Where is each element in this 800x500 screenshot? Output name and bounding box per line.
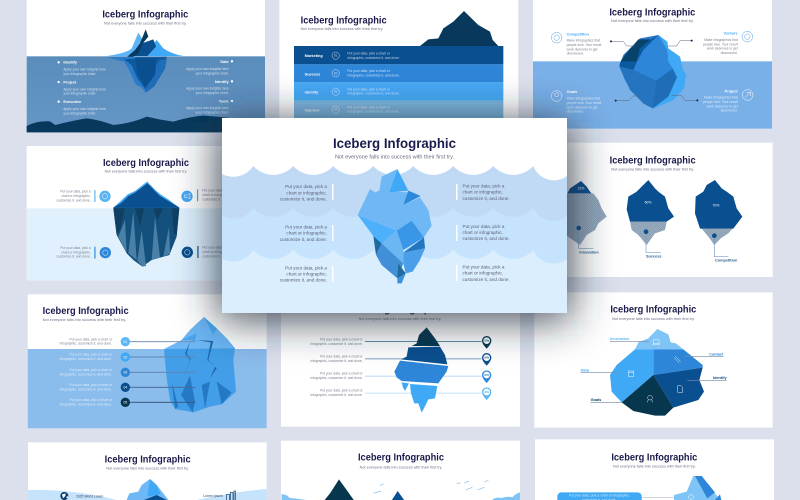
- label: Innovation: Innovation: [610, 337, 630, 341]
- text block right 2: [462, 224, 510, 241]
- text block right 3: chart or infographic,: [462, 271, 503, 276]
- icon row: top left: chart or infographic,: [61, 194, 91, 198]
- callout: Project: Project: [725, 89, 738, 93]
- panel: bottom left iceberg with waves: [28, 442, 267, 500]
- text block right 1: customize it, and done.: [462, 196, 510, 201]
- birds: [373, 480, 488, 493]
- panel subtitle: Not everyone falls into success with their first try.: [360, 465, 442, 469]
- panel: iceberg with four callouts: [533, 0, 772, 129]
- callout: Goals: people love. Your result: [567, 101, 601, 105]
- numbered line 02: [60, 352, 195, 362]
- numbered line 01: 01: [123, 340, 127, 344]
- panel subtitle: Not everyone falls into success with their first try.: [105, 170, 187, 174]
- right list: Identify: [186, 80, 233, 95]
- globe icon and label: [60, 492, 104, 500]
- icon row: bottom left: [56, 246, 111, 259]
- divider left 2: [332, 225, 334, 241]
- band: Marketing: infographic, customize it, and done.: [347, 56, 400, 60]
- callout: Goals: discovered.: [567, 110, 584, 114]
- right list: Identify: Apply your own insights here: [186, 87, 229, 91]
- panel title: Iceberg Infographic: [357, 305, 444, 316]
- panel subtitle: Not everyone falls into success with their first try.: [104, 22, 187, 26]
- iceberg: [113, 181, 179, 267]
- band: Marketing: Marketing: [305, 54, 323, 58]
- panel: three percentage icebergs: [533, 143, 773, 277]
- iceberg: Innovation: 15%: [578, 186, 584, 190]
- band: Improve: [294, 101, 503, 119]
- panel: bottom middle peaks and birds: [281, 441, 520, 500]
- callout: Venture: people love. Your result: [703, 42, 738, 46]
- callout: Goals: Make infographics that: [567, 97, 600, 101]
- left list: Executive: your infographic chart.: [63, 111, 96, 115]
- panel subtitle: Not everyone falls into success with their first try.: [43, 318, 126, 322]
- icon row: top left: customize it, and done.: [56, 198, 91, 202]
- panel subtitle: Not everyone falls into success with their first try.: [106, 467, 189, 471]
- text block right 3: [462, 264, 510, 282]
- iceberg: Innovation: [563, 181, 607, 254]
- iceberg segments: [610, 329, 704, 416]
- label: Contact: [684, 352, 724, 357]
- row text 1: infographic, customize it, and done.: [310, 342, 363, 346]
- panel: segmented iceberg with labels: [534, 292, 773, 428]
- text block right 1: [462, 183, 510, 201]
- pin 4: [482, 387, 491, 400]
- callout: Venture: Make infographics that: [704, 38, 738, 42]
- numbered line 02: infographic, customize it, and done.: [60, 357, 112, 361]
- text block right 2: Put your data, pick a: [462, 224, 505, 229]
- panel title: Iceberg Infographic: [610, 305, 697, 316]
- callout: Goals: Goals: [567, 90, 577, 94]
- callout: Project: people love. Your result: [703, 100, 738, 104]
- callout pill: [557, 492, 642, 500]
- numbered line 04: Put your data, pick a chart or: [69, 383, 113, 387]
- row text 2: Put your data, pick a chart or: [320, 355, 364, 359]
- pin 2: 20%: [484, 357, 490, 360]
- text block right 1: Put your data, pick a: [462, 183, 505, 188]
- panel title: Iceberg Infographic: [611, 452, 698, 463]
- panel subtitle: Not everyone falls into success with their first try.: [359, 317, 441, 321]
- right list: Tools: Tools: [219, 99, 229, 103]
- row text 2: [310, 355, 364, 363]
- connector lines: [611, 41, 697, 101]
- panel: dark iceberg with four icons: [27, 146, 266, 280]
- pin 3: [482, 370, 491, 383]
- callout: Goals: work deserves to get: [567, 105, 597, 109]
- central faceted iceberg: [358, 169, 432, 283]
- numbered line 02: 02: [123, 355, 127, 359]
- numbered line 01: [60, 337, 195, 346]
- text block left 2: Put your data, pick a: [285, 224, 327, 230]
- band: Improve: Improve: [305, 108, 320, 112]
- iceberg: Innovation: Innovation: [579, 250, 599, 254]
- iceberg above and below water: [107, 29, 183, 93]
- label: Goals: Goals: [591, 398, 601, 402]
- panel: bottom right iceberg callout: [535, 439, 774, 500]
- right list: Date: Date: [220, 60, 229, 64]
- divider right 1: [456, 184, 458, 200]
- panel title: Iceberg Infographic: [43, 306, 129, 317]
- left list: Project: your infographic chart.: [63, 92, 96, 96]
- wave layers: [222, 166, 567, 313]
- label: Goals: [591, 398, 622, 403]
- callout: Competition: Competition: [567, 32, 590, 36]
- panel: central slide: [222, 118, 567, 313]
- row text 2: infographic, customize it, and done.: [310, 359, 363, 363]
- left list: Executive: Executive: [63, 100, 81, 104]
- icon row: top right: chart or infographic,: [202, 193, 232, 197]
- icon row: bottom right: Put your data, pick a: [202, 246, 233, 250]
- row text 3: [310, 372, 364, 380]
- faceted iceberg: [619, 35, 686, 109]
- panel: iceberg with seabed: [27, 0, 265, 132]
- text block left 2: [280, 224, 327, 242]
- icon row: top left: [56, 190, 111, 202]
- icon row: top right: Put your data, pick a: [202, 189, 233, 193]
- iceberg: Success: [627, 180, 674, 259]
- icon row: bottom left: customize it, and done.: [56, 255, 91, 259]
- callout: Venture: discovered.: [721, 51, 738, 55]
- iceberg: Competition: 70%: [713, 203, 719, 207]
- icon row: top right: [181, 189, 237, 202]
- sliced iceberg: [394, 327, 448, 413]
- icon row: bottom left: Put your data, pick a: [60, 246, 91, 250]
- right list: Tools: [186, 99, 233, 114]
- panel subtitle: Not everyone falls into success with their first try.: [613, 464, 696, 468]
- text block right 2: chart or infographic,: [462, 230, 503, 235]
- numbered line 04: [60, 383, 195, 392]
- band: Identify: 03: [334, 90, 338, 94]
- label: Data: [581, 368, 620, 373]
- icon row: bottom right: customize it, and done.: [202, 254, 237, 258]
- callout: Project: Make infographics that: [704, 96, 738, 100]
- divider right 2: [456, 225, 458, 241]
- callout: Goals: [551, 90, 601, 114]
- pin 2: [482, 353, 491, 366]
- divider left 3: [332, 266, 334, 282]
- numbered line 04: 04: [123, 386, 127, 390]
- main subtitle: Not everyone falls into success with their first try.: [335, 154, 454, 160]
- text block left 3: customize it, and done.: [280, 278, 327, 283]
- right list: Date: Apply your own insights here: [186, 67, 229, 71]
- waves: [28, 489, 267, 500]
- band: Success: 02: [334, 71, 338, 75]
- left list: Project: [57, 80, 106, 96]
- text block left 1: chart or infographic,: [286, 190, 327, 195]
- row text 3: Put your data, pick a chart or: [320, 372, 364, 376]
- panel title: Iceberg Infographic: [301, 15, 387, 26]
- icon row: top left: Put your data, pick a: [60, 190, 91, 194]
- band: Identify: Put your data, pick a chart or: [347, 87, 391, 91]
- text block left 1: Put your data, pick a: [285, 184, 327, 189]
- callout: Venture: work deserves to get: [707, 47, 738, 51]
- iceberg: Competition: [695, 180, 742, 263]
- panel title: Iceberg Infographic: [102, 10, 189, 21]
- panel subtitle: Not everyone falls into success with their first try.: [611, 19, 694, 23]
- band: Success: infographic, customize it, and done.: [347, 73, 400, 77]
- right list: Identify: your infographic chart.: [196, 91, 229, 95]
- iceberg peak: [127, 479, 168, 500]
- iceberg: Success: Success: [646, 255, 662, 259]
- panel title: Iceberg Infographic: [103, 158, 190, 169]
- left list: Identify: your infographic chart.: [63, 72, 96, 76]
- divider left 1: [332, 184, 334, 200]
- white segment icons: [628, 340, 683, 402]
- panel: sliced iceberg with pins: [281, 293, 520, 427]
- text block left 1: customize it, and done.: [280, 197, 327, 202]
- band: Marketing: Put your data, pick a chart or: [347, 52, 391, 56]
- panel title: Iceberg Infographic: [105, 455, 191, 466]
- iceberg: Success: 60%: [645, 200, 651, 204]
- text block right 3: Put your data, pick a: [462, 264, 505, 270]
- pointer lines: [365, 341, 482, 394]
- band: Marketing: 01: [334, 54, 338, 58]
- band: Identify: Identify: [305, 91, 319, 95]
- row text 1: Put your data, pick a chart or: [320, 338, 364, 342]
- iceberg: Competition: Competition: [715, 259, 738, 263]
- numbered line 05: Put your data, pick a chart or: [69, 398, 113, 402]
- numbered line 03: Put your data, pick a chart or: [69, 368, 113, 372]
- text block left 1: [280, 184, 327, 202]
- text block right 3: customize it, and done.: [462, 277, 510, 282]
- connector: [642, 496, 682, 499]
- globe icon and label: 2025 World Lorem: [76, 495, 104, 499]
- band: Marketing: [294, 46, 503, 64]
- row text 3: infographic, customize it, and done.: [310, 376, 363, 380]
- iceberg: [164, 317, 236, 412]
- label: Identify: [687, 376, 728, 381]
- panel title: Iceberg Infographic: [358, 453, 445, 464]
- text block left 3: chart or infographic,: [286, 272, 327, 276]
- icon row: top right: customize it, and done.: [202, 197, 237, 201]
- numbered line 03: 03: [123, 371, 127, 375]
- callout pill: Put your data, pick a chart or infographic,: [569, 494, 630, 498]
- clouds: [282, 492, 520, 500]
- row text 4: Put your data, pick a chart or: [320, 389, 364, 393]
- callout: Competition: Make infographics that: [567, 39, 600, 43]
- band: Success: [294, 64, 503, 82]
- label: Data: Data: [581, 368, 590, 372]
- icon row: bottom right: [182, 246, 237, 258]
- numbered line 03: [60, 368, 195, 377]
- callout: Competition: [551, 32, 601, 56]
- icon row: bottom right: chart or infographic,: [202, 250, 232, 254]
- label: Contact: Contact: [709, 352, 724, 356]
- large peak: [324, 479, 354, 500]
- panel title: Iceberg Infographic: [610, 155, 696, 166]
- callout: Venture: Venture: [724, 31, 738, 35]
- band: Success: Success: [305, 72, 320, 76]
- right list: Date: your infographic chart.: [196, 71, 229, 75]
- numbered line 02: Put your data, pick a chart or: [69, 353, 113, 357]
- left list: Executive: [57, 100, 106, 115]
- band: Improve: Put your data, pick a chart or: [347, 105, 391, 109]
- row text 1: [310, 338, 364, 346]
- band: Improve: 04: [334, 108, 338, 112]
- bar icon and label: [203, 491, 235, 500]
- right list: Identify: Identify: [215, 80, 230, 84]
- left list: Project: Apply your own insights here: [63, 87, 106, 91]
- panel title: Iceberg Infographic: [609, 7, 696, 18]
- text block left 3: Put your data, pick a: [285, 265, 327, 270]
- callout: Project: work deserves to get: [707, 104, 738, 108]
- callout: Competition: people love. Your result: [567, 43, 601, 47]
- iceberg peak: [420, 11, 498, 46]
- callout: Project: [703, 89, 753, 113]
- numbered line 05: [60, 398, 195, 407]
- pin 1: [482, 336, 491, 349]
- row text 4: [310, 389, 364, 397]
- small peak: [392, 491, 404, 500]
- panel: iceberg with five numbered lines: [28, 294, 267, 428]
- row text 4: infographic, customize it, and done.: [310, 393, 363, 397]
- icon row: bottom left: chart or infographic,: [61, 250, 91, 254]
- panel subtitle: Not everyone falls into success with their first try.: [301, 27, 383, 31]
- panel: layered bands: [279, 0, 518, 120]
- panel subtitle: Not everyone falls into success with their first try.: [612, 317, 695, 321]
- iceberg peak: [674, 476, 722, 500]
- band: Identify: infographic, customize it, and done.: [347, 92, 400, 96]
- callout: Competition: discovered.: [567, 52, 584, 56]
- left list: Executive: Apply your own insights here: [63, 107, 106, 111]
- numbered line 01: infographic, customize it, and done.: [60, 342, 112, 346]
- left list: Identify: Identify: [63, 61, 78, 65]
- numbered line 05: infographic, customize it, and done.: [60, 402, 112, 406]
- pin 3: 30%: [484, 374, 490, 377]
- right list: Tools: your infographic chart.: [196, 110, 229, 114]
- callout: Project: discovered.: [721, 109, 738, 113]
- numbered line 04: infographic, customize it, and done.: [60, 387, 112, 391]
- right list: Tools: Apply your own insights here: [186, 106, 229, 110]
- left list: Identify: Apply your own insights here: [63, 68, 106, 72]
- panel subtitle: Not everyone falls into success with their first try.: [611, 167, 694, 171]
- divider right 3: [456, 265, 458, 281]
- callout: Competition: work deserves to get: [567, 47, 597, 51]
- pin 1: 10%: [484, 340, 490, 343]
- text block left 3: [280, 265, 327, 283]
- text block left 2: chart or infographic,: [286, 231, 327, 236]
- pin 4: 40%: [484, 391, 490, 394]
- right list: Date: [186, 60, 233, 75]
- callout: Venture: [703, 31, 753, 55]
- label: Identify: Identify: [713, 376, 728, 380]
- numbered line 01: Put your data, pick a chart or: [69, 337, 113, 341]
- text block right 2: customize it, and done.: [462, 236, 510, 241]
- seabed silhouette: [27, 116, 265, 132]
- left list: Identify: [57, 61, 106, 76]
- numbered line 03: infographic, customize it, and done.: [60, 372, 112, 376]
- band: Success: Put your data, pick a chart or: [347, 69, 391, 73]
- label: Innovation: [610, 337, 649, 342]
- main title: Iceberg Infographic: [333, 135, 456, 151]
- bar icon and label: Lorem Ipsum: [203, 494, 223, 498]
- band: Identify: [294, 82, 503, 101]
- numbered line 05: 05: [123, 401, 127, 405]
- connector end dots: [610, 40, 698, 102]
- text block right 1: chart or infographic,: [462, 190, 503, 194]
- band: Improve: infographic, customize it, and done.: [347, 110, 400, 114]
- text block left 2: customize it, and done.: [280, 237, 327, 242]
- shadow of central panel: [218, 122, 571, 320]
- left list: Project: Project: [63, 80, 77, 84]
